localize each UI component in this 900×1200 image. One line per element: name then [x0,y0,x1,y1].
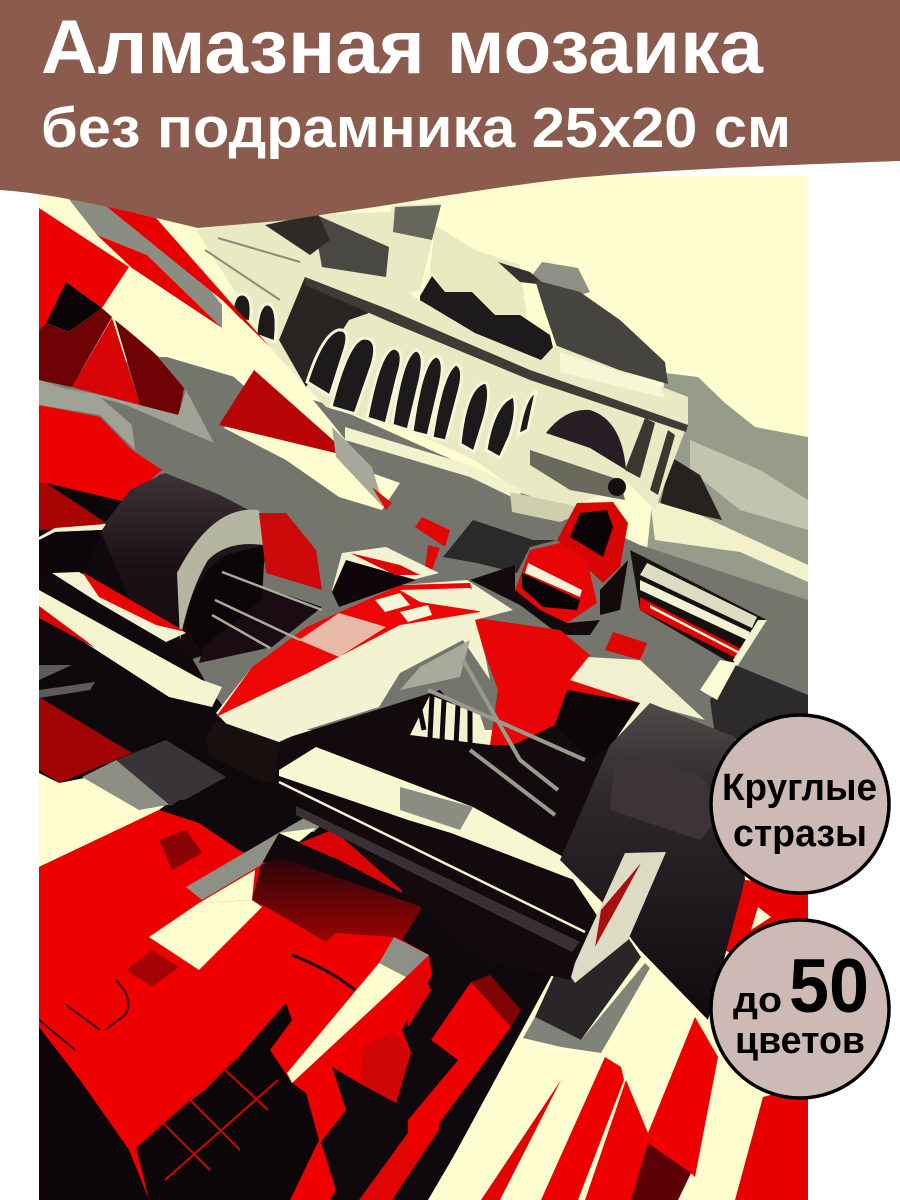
badge: round rhinestones: стразы [733,813,867,855]
dark cockpit rim [470,565,600,635]
race car [39,473,808,1020]
lower left pattern [39,527,560,1200]
tyre panel highlight [610,780,712,840]
cream curve behind nose [332,547,439,607]
red fender [259,513,322,590]
nose logo [299,613,386,657]
badge: up to 50 colours: цветов [735,1020,865,1062]
lower right stripes [428,880,808,1200]
rear side pod [565,657,705,736]
badge: up to 50 colours [711,920,889,1098]
badge: round rhinestones [711,715,889,893]
lower cream plate [279,747,574,880]
nose cone tip [205,720,279,782]
right front tyre [560,703,745,1020]
building with arches [196,203,688,522]
arches [232,294,536,458]
left front tyre [100,473,322,663]
badge: round rhinestones: Круглые [722,767,877,809]
small car silhouette [136,1003,319,1200]
title: Алмазная мозаика [41,5,764,90]
black underside [276,690,610,980]
sky background [39,176,808,1200]
rear right wheel [700,660,808,745]
dark engine cover [443,520,557,573]
top-left geometric shapes [39,198,400,540]
red body [470,617,640,745]
nose grey shade [400,640,470,690]
cockpit airbox [557,478,628,615]
suspension comb [410,660,585,815]
red side fin [605,632,647,660]
badge: up to 50 colours: 50 [789,944,869,1029]
nose red panel [216,583,480,717]
mountain and sea [647,373,808,600]
left cream wing [39,524,222,707]
badge: up to 50 colours: до [733,979,782,1020]
grey plate shade [400,787,473,830]
red mirror [415,517,450,570]
helmet [515,543,597,623]
rear wing [630,550,767,667]
subtitle: без подрамника 25х20 см [41,96,791,160]
poster artwork: racing car [39,176,808,1200]
nose [216,580,513,742]
hill with trees and smoke [420,225,668,384]
track surface [39,355,808,730]
header banner [0,0,900,228]
front wing endplate [571,852,666,983]
left wheel suspension [212,572,322,648]
main archway [546,410,626,470]
